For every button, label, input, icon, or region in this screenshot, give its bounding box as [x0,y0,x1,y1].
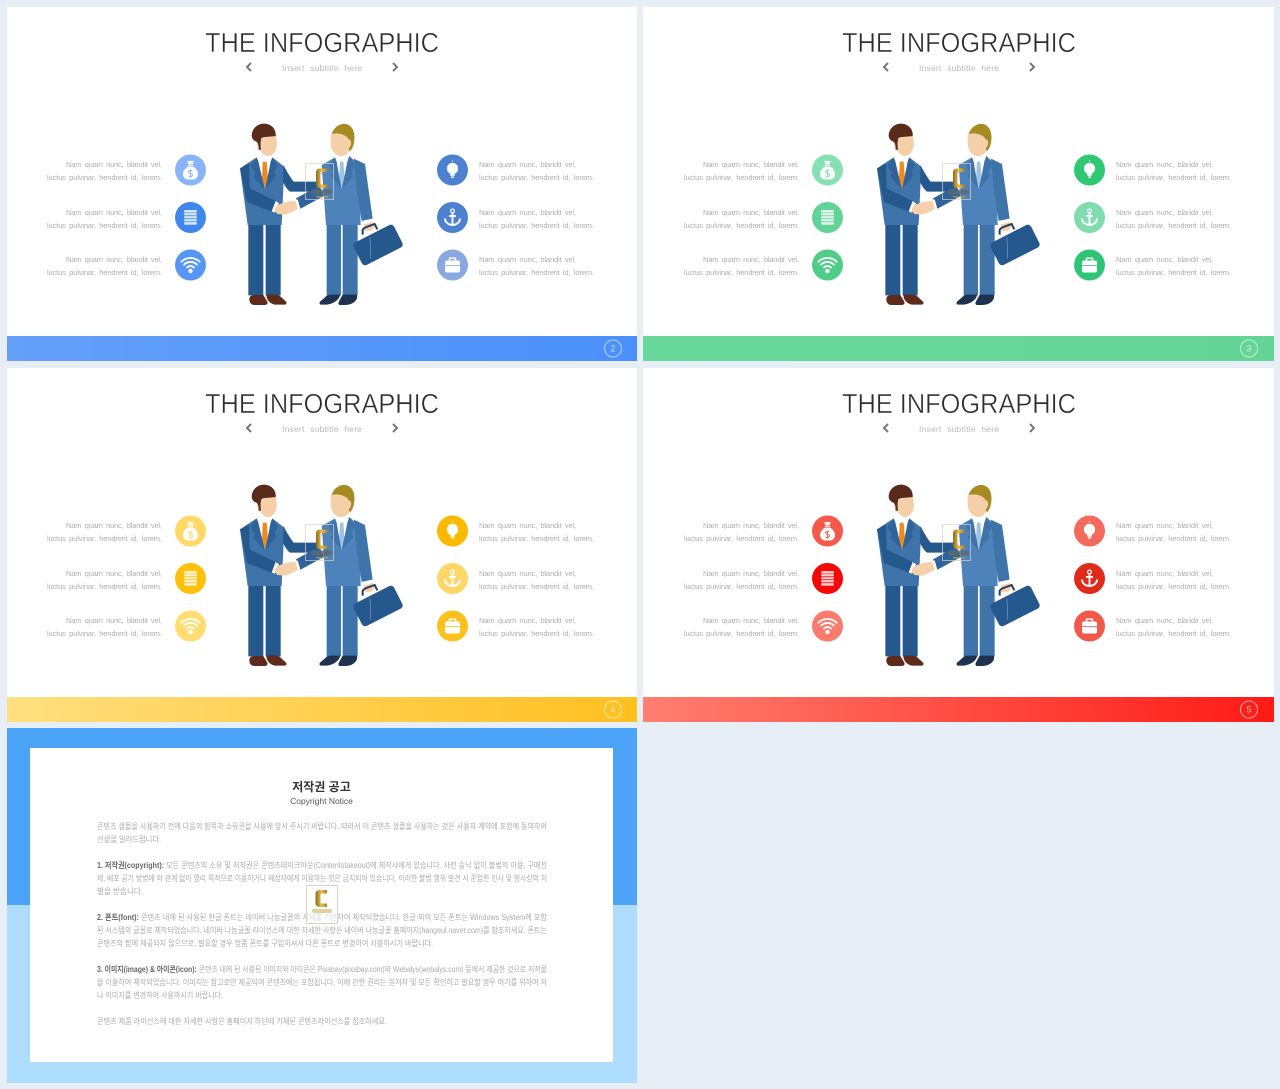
right text blocks: Nam quam nunc, blandit vel, [1116,569,1213,578]
right text blocks: luctus pulvinar, hendrerit id, lorem. [479,629,594,638]
right text blocks: luctus pulvinar, hendrerit id, lorem. [1116,221,1231,230]
illustration: two businessmen shaking hands [877,124,1041,305]
right text blocks [479,160,594,277]
left icons [175,516,206,642]
section 3: image and icon: 나 이미지를 변경하여 사용하시기 바랍니다. [97,990,223,1000]
left text blocks: luctus pulvinar, hendrerit id, lorem. [47,629,162,638]
subtitle with arrows: Insert subtitle here [919,63,999,73]
right text blocks: luctus pulvinar, hendrerit id, lorem. [1116,582,1231,591]
subtitle with arrows: Insert subtitle here [282,424,362,434]
subtitle with arrows: Insert subtitle here [282,63,362,73]
left text blocks: Nam quam nunc, blandit vel, [66,521,162,530]
left text blocks: luctus pulvinar, hendrerit id, lorem. [47,221,162,230]
footer bar with page number [643,697,1274,722]
section 2: font: 된 시스템의 글꼴로 제작되었습니다. 네이버 나눔글꼴 라이선스에 대한 자세한 사항은 네이버 나눔글꼴 홈페이지(hangeul.naver.com)를 참조하세요. 폰트는 [97,925,547,935]
illustration: two businessmen shaking hands [877,485,1041,666]
right text blocks [1116,521,1231,638]
right text blocks [1116,160,1231,277]
section 1: copyright: 1. 저작권(copyright): 모든 콘텐츠의 소유 및 저작권은 콘텐츠테이크아웃(Contentstakeout)에 제작사에게 있습니다. 사전 승낙 없이 불법적 이용, 구매전 [97,860,547,870]
section 3: image and icon: 3. 이미지(image) & 아이콘(icon): 콘텐츠 내에 된 사용된 이미지와 아이콘은 Pixabay(pixabay.com)와 Webalys(webalys.com) 등에서 제공한 것으로 저작물 [97,964,547,974]
left text blocks: luctus pulvinar, hendrerit id, lorem. [684,629,799,638]
left text blocks: Nam quam nunc, blandit vel, [66,616,162,625]
subtitle with arrows [247,424,397,434]
subtitle with arrows [884,424,1034,434]
panel: copyright notice [7,728,637,1083]
footer bar with page number: 4 [610,704,616,714]
watermark [306,886,338,924]
white notice card [30,748,613,1062]
left text blocks: luctus pulvinar, hendrerit id, lorem. [684,173,799,182]
left text blocks: Nam quam nunc, blandit vel, [66,208,162,217]
right text blocks: Nam quam nunc, blandit vel, [1116,255,1213,264]
right text blocks [479,521,594,638]
subtitle with arrows [247,63,397,73]
left text blocks: Nam quam nunc, blandit vel, [66,160,162,169]
section 1: copyright: 벌을 받습니다. [97,886,143,896]
left text blocks: Nam quam nunc, blandit vel, [703,521,799,530]
title: THE INFOGRAPHIC [205,27,439,58]
footer bar with page number: 5 [1246,704,1252,714]
intro paragraph: 콘텐츠 샘플을 사용하기 전에 다음의 항목과 소유권을 사용에 앞서 주시기 바랍니다. 따라서 이 콘텐츠 샘플을 사용하는 것은 사용자 계약에 포함에 동의하여 [97,821,547,831]
left text blocks: Nam quam nunc, blandit vel, [703,255,799,264]
left text blocks [47,160,162,277]
right text blocks: luctus pulvinar, hendrerit id, lorem. [1116,629,1231,638]
left text blocks: luctus pulvinar, hendrerit id, lorem. [47,173,162,182]
left text blocks [47,521,162,638]
right text blocks: Nam quam nunc, blandit vel, [1116,616,1213,625]
intro paragraph: 선생을 알려드립니다. [97,834,161,844]
title: THE INFOGRAPHIC [842,388,1076,419]
right text blocks: luctus pulvinar, hendrerit id, lorem. [1116,173,1231,182]
right text blocks: luctus pulvinar, hendrerit id, lorem. [479,268,594,277]
left text blocks: Nam quam nunc, blandit vel, [703,569,799,578]
left text blocks: Nam quam nunc, blandit vel, [703,616,799,625]
left text blocks: luctus pulvinar, hendrerit id, lorem. [684,268,799,277]
footer bar with page number [7,697,637,722]
right icons [437,516,468,642]
left text blocks: Nam quam nunc, blandit vel, [703,160,799,169]
panel: yellow slide [7,368,637,722]
right text blocks: luctus pulvinar, hendrerit id, lorem. [479,582,594,591]
right text blocks: luctus pulvinar, hendrerit id, lorem. [479,534,594,543]
left text blocks [684,160,799,277]
notice heading: 저작권 공고 [292,779,351,794]
footer bar with page number [643,336,1274,361]
left text blocks: luctus pulvinar, hendrerit id, lorem. [684,582,799,591]
right text blocks: Nam quam nunc, blandit vel, [1116,208,1213,217]
left text blocks: luctus pulvinar, hendrerit id, lorem. [47,268,162,277]
notice subheading: Copyright Notice [290,796,353,806]
section 3: image and icon [97,964,547,1000]
right text blocks: luctus pulvinar, hendrerit id, lorem. [479,173,594,182]
left icons [812,154,843,280]
panel: green slide [643,7,1274,361]
right text blocks: Nam quam nunc, blandit vel, [479,208,576,217]
illustration: two businessmen shaking hands [240,124,404,305]
right text blocks: Nam quam nunc, blandit vel, [479,160,576,169]
footer bar with page number [7,336,637,361]
panel: blue slide [7,7,637,361]
left text blocks: luctus pulvinar, hendrerit id, lorem. [684,534,799,543]
left icons [175,154,206,280]
right text blocks: luctus pulvinar, hendrerit id, lorem. [1116,268,1231,277]
footer bar with page number: 3 [1246,344,1252,354]
right icons [1074,154,1105,280]
left text blocks: luctus pulvinar, hendrerit id, lorem. [47,534,162,543]
title: THE INFOGRAPHIC [205,388,439,419]
left text blocks: Nam quam nunc, blandit vel, [66,569,162,578]
left text blocks: Nam quam nunc, blandit vel, [66,255,162,264]
right text blocks: Nam quam nunc, blandit vel, [479,255,576,264]
closing note: 콘텐츠 제품 라이선스에 대한 자세한 사항은 홈페이지 하단에 기재된 콘텐츠라이선스를 참조하세요. [97,1016,387,1026]
left text blocks: Nam quam nunc, blandit vel, [703,208,799,217]
section 1: copyright: 재, 배포 공기 방법에 와 관계 없이 영리 목적으로 이용하거나 제삼자에게 이용하는 것은 금지되어 있습니다. 이러한 불법 행위 발견 시 준엄한 민사 및 형사상의 처 [97,873,547,883]
right text blocks: luctus pulvinar, hendrerit id, lorem. [1116,534,1231,543]
right icons [437,154,468,280]
right text blocks: Nam quam nunc, blandit vel, [479,616,576,625]
right text blocks: Nam quam nunc, blandit vel, [1116,521,1213,530]
illustration: two businessmen shaking hands [240,485,404,666]
footer bar with page number: 2 [610,344,616,354]
two-tone blue backdrop [7,728,637,1083]
right icons [1074,516,1105,642]
section 1: copyright [97,860,547,896]
slide background [7,7,637,361]
right text blocks: Nam quam nunc, blandit vel, [479,569,576,578]
subtitle with arrows [884,63,1034,73]
left text blocks [684,521,799,638]
panel: red slide [643,368,1274,722]
right text blocks: Nam quam nunc, blandit vel, [1116,160,1213,169]
section 2: font: 콘텐츠의 팜에 제공되지 않으므로, 필요할 경우 정품 폰트를 구입하셔서 다른 폰트로 변경하여 사용하시기 바랍니다. [97,938,433,948]
slide background [643,7,1274,361]
section 3: image and icon: 을 이용하여 제작되었습니다. 이미지는 참고로만 제공되며 콘텐츠에는 포함됩니다. 이에 관한 권리는 원저자 및 모든 확인하고 필요할 경우 여기를 위하여 저 [97,977,547,987]
section 2: font: 2. 폰트(font): 콘텐츠 내에 된 사용된 한글 폰트는 네이버 나눔글꼴의 서체를 기반하여 제작되었습니다. 한글 외의 모든 폰트는 Windows System에 포함 [97,912,548,922]
left icons [812,516,843,642]
right text blocks: luctus pulvinar, hendrerit id, lorem. [479,221,594,230]
title: THE INFOGRAPHIC [842,27,1076,58]
intro paragraph [97,821,547,844]
subtitle with arrows: Insert subtitle here [919,424,999,434]
slide background [643,368,1274,722]
section 2: font [97,912,548,948]
right text blocks: Nam quam nunc, blandit vel, [479,521,576,530]
left text blocks: luctus pulvinar, hendrerit id, lorem. [684,221,799,230]
slide background [7,368,637,722]
left text blocks: luctus pulvinar, hendrerit id, lorem. [47,582,162,591]
